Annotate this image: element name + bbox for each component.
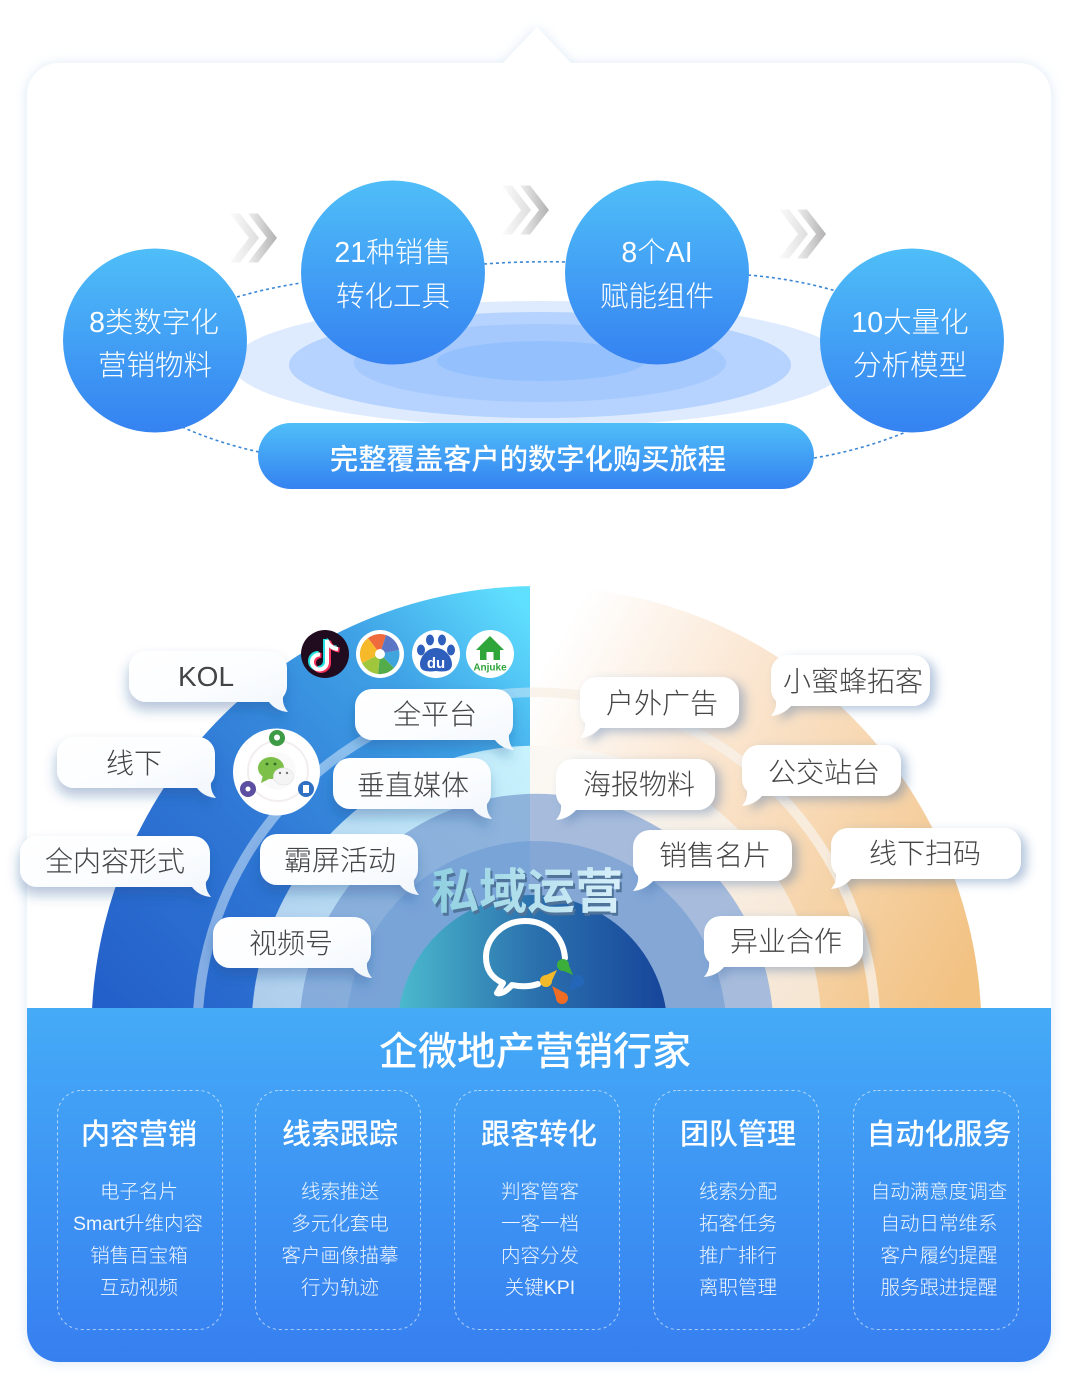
bubble: 垂直媒体	[333, 758, 492, 819]
column: 自动化服务: 客户履约提醒	[880, 1245, 998, 1267]
heading: 企微地产营销行家: 企微地产营销行家	[379, 1031, 691, 1074]
bubble: 户外广告: 户外广告	[606, 688, 718, 719]
column: 内容营销: 销售百宝箱	[90, 1245, 188, 1267]
bubble: 视频号	[213, 917, 372, 978]
column: 跟客转化: 关键KPI	[505, 1277, 575, 1299]
bubble: 霸屏活动	[260, 834, 419, 895]
bubble: 垂直媒体: 垂直媒体	[357, 770, 469, 801]
icon: enterprise wechat logo	[486, 921, 584, 1004]
bubble: 霸屏活动: 霸屏活动	[284, 845, 396, 876]
column: 自动化服务	[854, 1090, 1018, 1330]
column: 团队管理: 拓客任务	[699, 1213, 777, 1235]
column: 自动化服务: 服务跟进提醒	[880, 1277, 998, 1299]
concentric ellipses backdrop	[232, 301, 848, 427]
column: 线索跟踪: 线索推送	[301, 1181, 379, 1203]
bubble: 销售名片: 销售名片	[659, 840, 771, 871]
banner: 完整覆盖客户的数字化购买旅程: 完整覆盖客户的数字化购买旅程	[330, 443, 726, 475]
column: 内容营销: 电子名片	[100, 1181, 178, 1203]
column: 内容营销: 内容营销	[81, 1118, 197, 1151]
bubble: 公交站台	[742, 745, 901, 806]
bubble: 全内容形式: 全内容形式	[45, 846, 185, 877]
column: 内容营销: 互动视频	[100, 1277, 178, 1299]
icon: tiktok	[301, 630, 349, 678]
bubble: 异业合作: 异业合作	[730, 926, 842, 957]
bubble: 海报物料: 海报物料	[583, 769, 695, 800]
circle: 10大量化分析模型: 分析模型	[853, 350, 967, 382]
bubble: KOL	[129, 651, 288, 712]
circle: 8类数字化营销物料: 营销物料	[98, 350, 212, 382]
arrow: chevrons 2	[502, 186, 549, 234]
icon: baidu	[412, 630, 460, 678]
circle: 8类数字化营销物料: 8类数字化	[89, 307, 219, 339]
column: 自动化服务: 自动满意度调查	[871, 1181, 1007, 1203]
column: 跟客转化: 判客管客	[501, 1181, 579, 1203]
bubble: 全平台	[355, 689, 514, 750]
icon: aperture	[356, 630, 404, 678]
column: 内容营销	[58, 1090, 222, 1330]
column: 团队管理: 线索分配	[699, 1181, 777, 1203]
icon: wechat circle	[233, 728, 320, 816]
circle: 21种销售转化工具: 转化工具	[336, 281, 450, 313]
circle: 10大量化分析模型: 10大量化	[851, 307, 969, 339]
arrow: chevrons 1	[230, 214, 277, 262]
semicircle chart: left half blue	[92, 586, 530, 1008]
bubble: 户外广告	[580, 677, 739, 738]
column: 线索跟踪	[256, 1090, 420, 1330]
bubble: 海报物料	[556, 759, 715, 820]
column: 自动化服务: 自动日常维系	[880, 1213, 998, 1235]
bubble: 视频号: 视频号	[249, 928, 333, 959]
column: 团队管理	[654, 1090, 818, 1330]
bubble: 全内容形式	[20, 836, 211, 897]
icon: anjuke	[466, 630, 514, 678]
column: 线索跟踪: 多元化套电	[291, 1213, 389, 1235]
semicircle chart: right half orange	[530, 595, 981, 1008]
icon: anjuke: Anjuke	[473, 662, 507, 674]
column: 内容营销: Smart升维内容	[73, 1213, 203, 1235]
heading: 私域运营: 私域运营	[433, 869, 625, 922]
bubble: KOL: KOL	[178, 661, 234, 692]
column: 团队管理: 离职管理	[699, 1277, 777, 1299]
bubble: 小蜜蜂拓客: 小蜜蜂拓客	[783, 666, 923, 697]
circle: 8个AI赋能组件: 8个AI	[621, 237, 693, 269]
bubble: 线下: 线下	[106, 748, 162, 779]
bubble: 销售名片	[633, 830, 792, 891]
heading: 私域运营: 私域运营	[431, 866, 623, 919]
dashed connector lines	[182, 262, 906, 458]
bubble: 小蜜蜂拓客	[771, 655, 930, 716]
panel: bottom blue product section	[27, 1008, 1051, 1362]
core semicircle	[399, 895, 666, 1008]
column: 跟客转化	[454, 1090, 620, 1330]
bubble: 异业合作	[704, 916, 863, 977]
column: 团队管理: 推广排行	[699, 1245, 777, 1267]
circle: 21种销售转化工具	[301, 180, 485, 364]
bubble: 线下扫码	[831, 828, 1021, 889]
column: 团队管理: 团队管理	[680, 1118, 796, 1151]
bubble: 线下	[57, 737, 216, 798]
arrow: chevrons 3	[779, 210, 826, 258]
column: 跟客转化: 内容分发	[501, 1245, 579, 1267]
column: 线索跟踪: 线索跟踪	[282, 1118, 398, 1151]
column: 线索跟踪: 行为轨迹	[301, 1277, 379, 1299]
circle: 21种销售转化工具: 21种销售	[334, 237, 452, 269]
bubble: 全平台: 全平台	[393, 699, 477, 730]
icon: baidu: du	[427, 655, 445, 672]
column: 跟客转化: 一客一档	[501, 1213, 579, 1235]
circle: 8个AI赋能组件	[565, 180, 749, 364]
circle: 10大量化分析模型	[820, 248, 1004, 432]
circle: 8个AI赋能组件: 赋能组件	[600, 281, 714, 313]
bubble: 公交站台: 公交站台	[768, 757, 880, 788]
bubble: 线下扫码: 线下扫码	[869, 838, 981, 869]
column: 线索跟踪: 客户画像描摹	[281, 1245, 399, 1267]
column: 跟客转化: 跟客转化	[481, 1118, 597, 1151]
circle: 8类数字化营销物料	[63, 248, 247, 432]
banner: 完整覆盖客户的数字化购买旅程	[258, 423, 814, 489]
column: 自动化服务: 自动化服务	[866, 1118, 1012, 1151]
